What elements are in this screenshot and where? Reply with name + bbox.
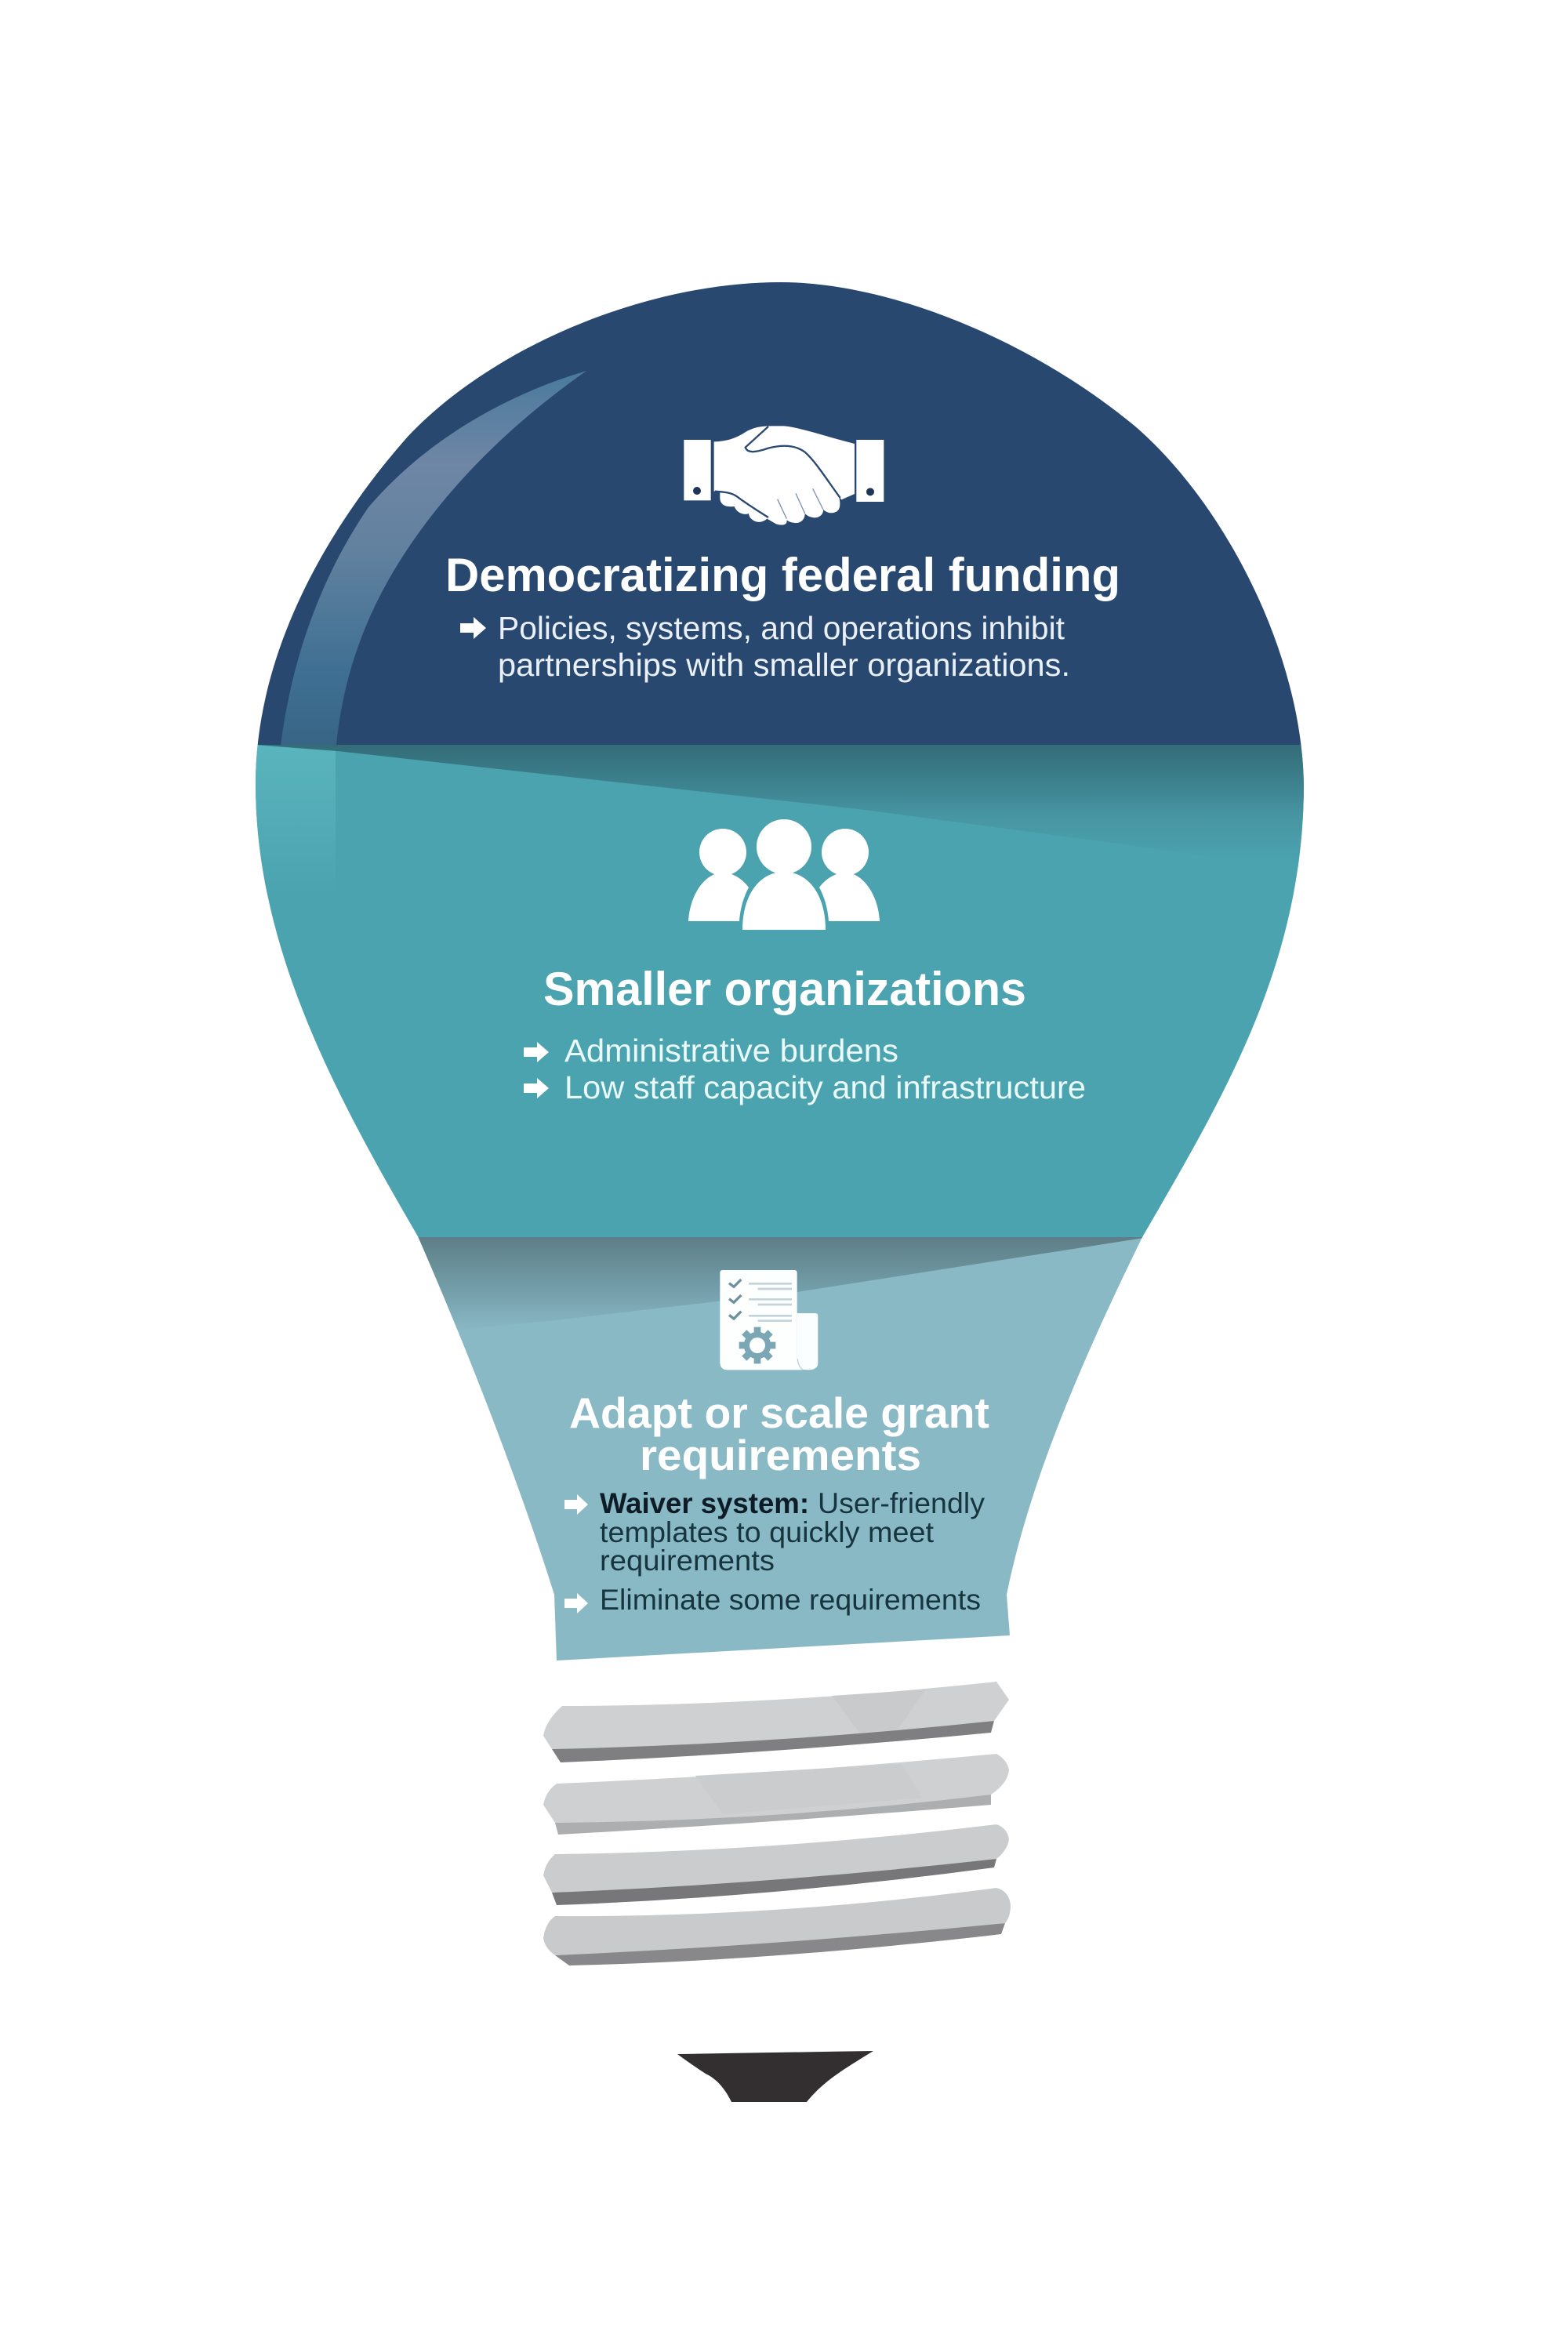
screw base threads bbox=[543, 1682, 1011, 1965]
panel: democratizing band bbox=[235, 267, 1333, 745]
panel: smaller organizations band bbox=[235, 745, 1333, 1237]
icon: checklist document with gear bbox=[720, 1270, 818, 1370]
base contact tip bbox=[677, 2051, 873, 2102]
heading: smaller organizations: Smaller organizations bbox=[543, 963, 1026, 1015]
bullet: eliminate requirements: Eliminate some requirements bbox=[600, 1584, 981, 1616]
icon: people group bbox=[688, 819, 880, 930]
teal band shadow wedge bbox=[256, 745, 1317, 870]
heading: democratizing federal funding: Democratizing federal funding bbox=[445, 549, 1120, 601]
bullet: waiver system: requirements bbox=[600, 1544, 775, 1577]
thread 4 bbox=[543, 1888, 1011, 1965]
bullet: waiver system: templates to quickly meet bbox=[600, 1516, 935, 1548]
bullet: policies: Policies, systems, and operations inhibit bbox=[498, 610, 1065, 646]
heading: adapt or scale grant requirements: requirements bbox=[640, 1431, 921, 1479]
bullet: waiver system bbox=[564, 1487, 985, 1577]
thread 1 bbox=[543, 1682, 1009, 1762]
heading: adapt or scale grant requirements: Adapt or scale grant bbox=[569, 1388, 989, 1437]
bullet: administrative burdens: Administrative burdens bbox=[564, 1033, 898, 1069]
icon: handshake bbox=[684, 426, 884, 525]
arrow bbox=[460, 617, 486, 639]
thread 3 bbox=[543, 1824, 1009, 1905]
highlight crescent bbox=[281, 371, 586, 745]
panel: adapt requirements band bbox=[419, 1237, 1142, 1661]
thread 2 bbox=[543, 1754, 1009, 1835]
lightbulb infographic bbox=[256, 282, 1304, 2102]
bullet: policies: partnerships with smaller organizations. bbox=[498, 647, 1070, 683]
bullet: waiver system: Waiver system: bbox=[600, 1487, 809, 1519]
bullet: waiver system: User-friendly bbox=[818, 1487, 985, 1519]
pale band shadow wedge bbox=[408, 1237, 1149, 1333]
bulb glass bbox=[235, 267, 1333, 1676]
teal band left highlight bbox=[251, 745, 336, 894]
bullet: policies bbox=[460, 610, 1070, 683]
heading: adapt or scale grant requirements bbox=[569, 1388, 989, 1479]
bullet: low staff capacity: Low staff capacity and infrastructure bbox=[564, 1069, 1086, 1105]
